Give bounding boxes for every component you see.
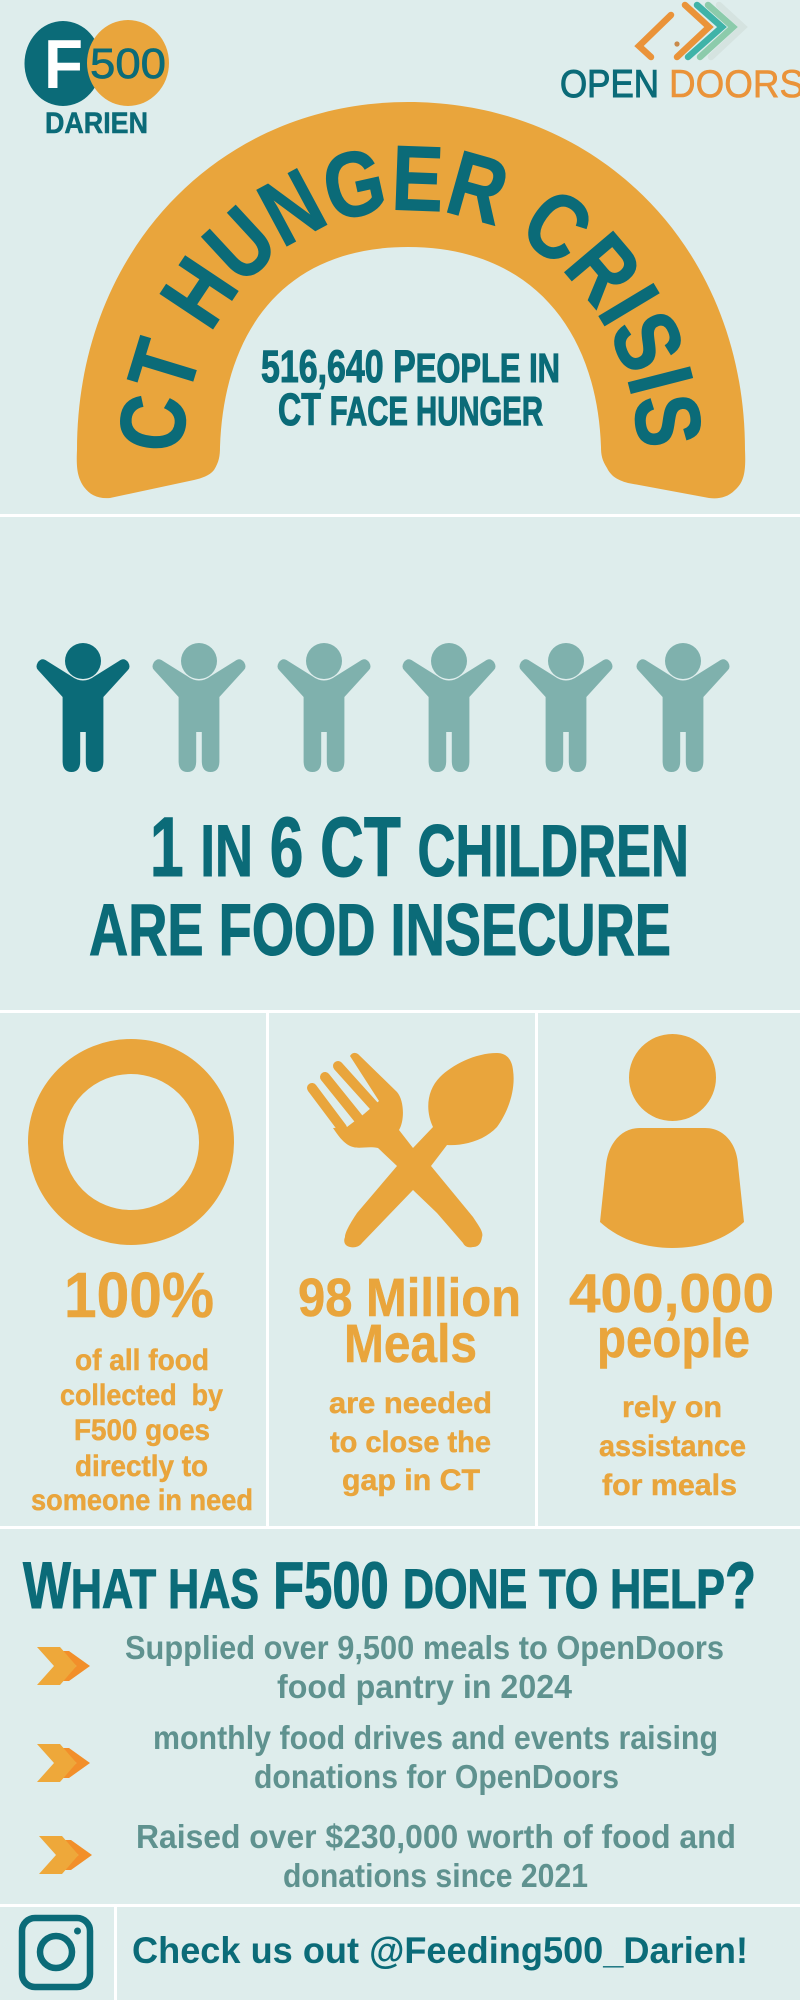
child icon	[636, 643, 730, 772]
panel: 100 percent	[31, 1056, 253, 1517]
icon: fork and spoon	[312, 1053, 514, 1247]
panel: 400,000 people	[569, 1034, 774, 1502]
stat description: F500 goes	[74, 1414, 210, 1447]
stat description: assistance	[599, 1430, 746, 1463]
icon: plate ring	[46, 1056, 216, 1228]
panel: 98 million meals: Meals	[344, 1314, 477, 1374]
logo: F500 Darien: F	[44, 25, 83, 103]
stat: 400,000 people: 400,000	[569, 1262, 774, 1324]
bullet text: monthly food drives and events raising	[153, 1719, 718, 1756]
icon: chevron	[39, 1836, 92, 1874]
logo: F500 Darien: DARIEN	[45, 107, 148, 140]
bullet text: Raised over $230,000 worth of food and	[136, 1818, 736, 1855]
child icon	[520, 643, 612, 772]
bullet: meals supplied	[37, 1629, 724, 1705]
stat description	[329, 1387, 492, 1497]
bullet text	[153, 1719, 718, 1795]
bullet: food drives	[37, 1719, 718, 1795]
child icon: highlighted	[36, 643, 130, 772]
stat description	[31, 1344, 253, 1517]
stat description: of all food	[75, 1344, 209, 1377]
logo: F500 Darien	[24, 20, 169, 140]
icon: instagram	[22, 1918, 90, 1987]
icon: chevron	[37, 1647, 90, 1685]
bullet text: donations for OpenDoors	[254, 1758, 619, 1795]
stat description: to close the	[330, 1426, 491, 1459]
stat description: gap in CT	[342, 1464, 480, 1497]
stat description: collected by	[60, 1379, 223, 1412]
logo: Open Doors: OPEN	[560, 63, 659, 106]
stat description	[599, 1391, 746, 1502]
panel: 98 million meals	[298, 1053, 521, 1497]
stat description: for meals	[602, 1469, 737, 1502]
title arch	[76, 102, 746, 498]
bullet: money raised	[39, 1818, 736, 1894]
subtitle: people facing hunger	[261, 341, 560, 435]
bullet text	[136, 1818, 736, 1894]
icon: person	[600, 1034, 744, 1248]
icon: chevron	[37, 1744, 90, 1782]
heading: children food insecure: 1 IN 6 CT CHILDREN	[150, 800, 689, 894]
stat: 98 Million Meals: 98 Million	[298, 1268, 521, 1328]
stat: 100%: 100%	[64, 1259, 214, 1331]
bullet text: food pantry in 2024	[277, 1668, 573, 1705]
logo: F500 Darien: 500	[90, 40, 166, 88]
children pictogram row	[36, 643, 730, 772]
child icon	[278, 643, 370, 772]
arch title text: CT HUNGER CRISIS	[120, 146, 701, 448]
stat description: someone in need	[31, 1484, 253, 1517]
bullet text: donations since 2021	[283, 1857, 588, 1894]
arch shape	[77, 102, 745, 498]
stat description: rely on	[622, 1391, 722, 1424]
child icon	[152, 643, 246, 772]
bullet text	[125, 1629, 724, 1705]
subtitle: people facing hunger: 516,640 PEOPLE IN	[261, 341, 560, 392]
heading: children food insecure	[89, 800, 689, 971]
stat description: directly to	[75, 1450, 208, 1483]
child icon	[402, 643, 496, 772]
stat description: are needed	[329, 1387, 492, 1420]
footer call to action: Check us out @Feeding500_Darien!	[132, 1930, 748, 1971]
bullet text: Supplied over 9,500 meals to OpenDoors	[125, 1629, 724, 1666]
panel: 400,000 people: people	[597, 1307, 750, 1369]
logo: Open Doors	[560, 5, 800, 106]
subtitle: people facing hunger: CT FACE HUNGER	[278, 384, 543, 435]
heading: what has F500 done: WHAT HAS F500 DONE TO HELP?	[23, 1548, 756, 1622]
